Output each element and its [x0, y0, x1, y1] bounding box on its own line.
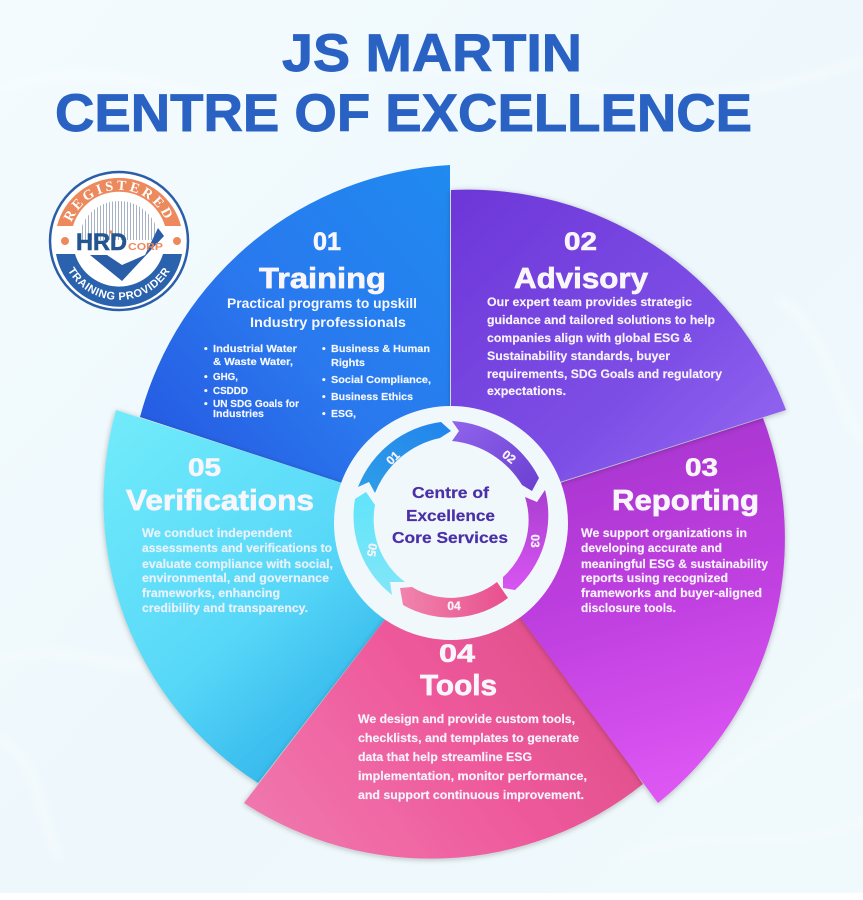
arrow 04	[400, 582, 508, 618]
training topics left column: •	[204, 343, 208, 355]
arrow 03	[503, 490, 548, 590]
orange band	[57, 178, 181, 226]
panel: 04 tools: and support continuous improvement.	[358, 790, 584, 802]
panel: 03 reporting: meaningful ESG & sustainability	[581, 559, 769, 571]
panel: 05 verifications: frameworks, enhancing	[142, 588, 280, 600]
arrow 05: 05	[364, 542, 380, 558]
centre label: Core Services	[392, 530, 508, 547]
panel: 03 reporting: developing accurate and	[581, 543, 722, 555]
panel: 01 training: 01	[313, 228, 341, 256]
panel: 04 tools	[244, 600, 643, 859]
title: JS MARTIN	[282, 24, 582, 83]
panel: 03 reporting: We support organizations in	[581, 528, 747, 540]
title	[55, 24, 752, 143]
panel: 02 advisory: Sustainability standards, buyer	[487, 351, 671, 363]
panel: 05 verifications: Verifications	[126, 485, 314, 517]
panel: 02 advisory: Advisory	[514, 263, 648, 295]
training topics right column: ESG,	[331, 408, 356, 420]
panel: 03 reporting	[500, 418, 785, 803]
blue band	[56, 254, 182, 307]
arrow 01	[358, 422, 451, 493]
panel: 02 advisory: 02	[564, 228, 597, 256]
training topics right column: •	[322, 408, 326, 420]
panel: 02 advisory: Our expert team provides strategic	[487, 297, 693, 309]
panel: 05 verifications: evaluate compliance with social,	[142, 559, 333, 571]
panel: 05 verifications: assessments and verifications to	[142, 543, 332, 555]
centre hub	[334, 406, 568, 640]
panel: 02 advisory	[451, 190, 786, 500]
badge: HRD Corp registered training provider: HRD	[76, 229, 127, 256]
panel: 02 advisory: companies align with global ESG &	[487, 333, 692, 345]
check mark	[90, 228, 164, 281]
centre label	[392, 485, 508, 547]
panel: 04 tools: Tools	[420, 670, 497, 702]
panel: 05 verifications: environmental, and governance	[142, 573, 329, 585]
training topics left column: Industrial Water	[213, 343, 297, 355]
training topics left column	[204, 343, 299, 420]
training topics left column: CSDDD	[213, 385, 248, 397]
panel: 04 tools: 04	[439, 640, 475, 668]
panel: 03 reporting: 03	[685, 454, 718, 482]
training topics right column: Social Compliance,	[331, 374, 431, 386]
panel: 04 tools: implementation, monitor performance,	[358, 771, 587, 783]
title: CENTRE OF EXCELLENCE	[55, 84, 752, 143]
arrow 02	[452, 421, 539, 491]
training topics left column: •	[204, 385, 208, 397]
panel: 01 training: Industry professionals	[250, 315, 406, 330]
panel: 05 verifications: credibility and transparency.	[142, 603, 308, 615]
training topics left column: •	[204, 398, 208, 410]
training topics left column: GHG,	[213, 371, 238, 383]
training topics right column: Business Ethics	[331, 391, 413, 403]
training topics right column: •	[322, 343, 326, 355]
training topics right column: •	[322, 391, 326, 403]
badge: HRD Corp registered training provider	[48, 170, 190, 312]
panel: 03 reporting: frameworks and buyer-aligned	[581, 588, 762, 600]
training topics left column: UN SDG Goals for	[213, 398, 299, 410]
panel: 02 advisory: expectations.	[487, 386, 566, 398]
centre label: Excellence	[406, 508, 495, 525]
badge: HRD Corp registered training provider: REGISTERED	[63, 180, 172, 222]
training topics right column	[322, 343, 431, 420]
hatch	[82, 200, 156, 240]
panel: 04 tools: We design and provide custom tools,	[358, 714, 575, 726]
training topics right column: •	[322, 374, 326, 386]
panel: 01 training: Practical programs to upskill	[227, 296, 417, 311]
panel: 05 verifications: 05	[188, 454, 221, 482]
panel: 03 reporting: Reporting	[612, 485, 759, 517]
arrow 02: 02	[499, 447, 519, 467]
badge: HRD Corp registered training provider: CORP	[128, 242, 163, 253]
training topics left column: •	[204, 371, 208, 383]
panel: 05 verifications	[103, 410, 400, 783]
training topics right column: Rights	[331, 357, 365, 369]
arrow 03: 03	[528, 534, 542, 548]
arrow 01: 01	[383, 448, 403, 468]
training topics right column: Business & Human	[331, 343, 430, 355]
training topics left column: Industries	[213, 408, 264, 420]
panel: 01 training: Training	[259, 263, 386, 295]
white ring	[334, 406, 568, 640]
arrow 05	[354, 492, 405, 595]
panel: 02 advisory: guidance and tailored solutions to help	[487, 315, 715, 327]
badge: HRD Corp registered training provider: TRAINING PROVIDER	[69, 266, 170, 300]
panel: 05 verifications: We conduct independent	[142, 528, 292, 540]
training topics left column: & Waste Water,	[213, 356, 293, 368]
panel: 02 advisory: requirements, SDG Goals and regulatory	[487, 369, 723, 381]
panel: 04 tools: checklists, and templates to generate	[358, 733, 579, 745]
panel: 04 tools: data that help streamline ESG	[358, 752, 532, 764]
panel: 01 training	[140, 165, 450, 525]
panel: 03 reporting: disclosure tools.	[581, 603, 676, 615]
panel: 03 reporting: reports using recognized	[581, 573, 728, 585]
centre label: Centre of	[412, 485, 490, 502]
arrow 04: 04	[447, 599, 461, 613]
